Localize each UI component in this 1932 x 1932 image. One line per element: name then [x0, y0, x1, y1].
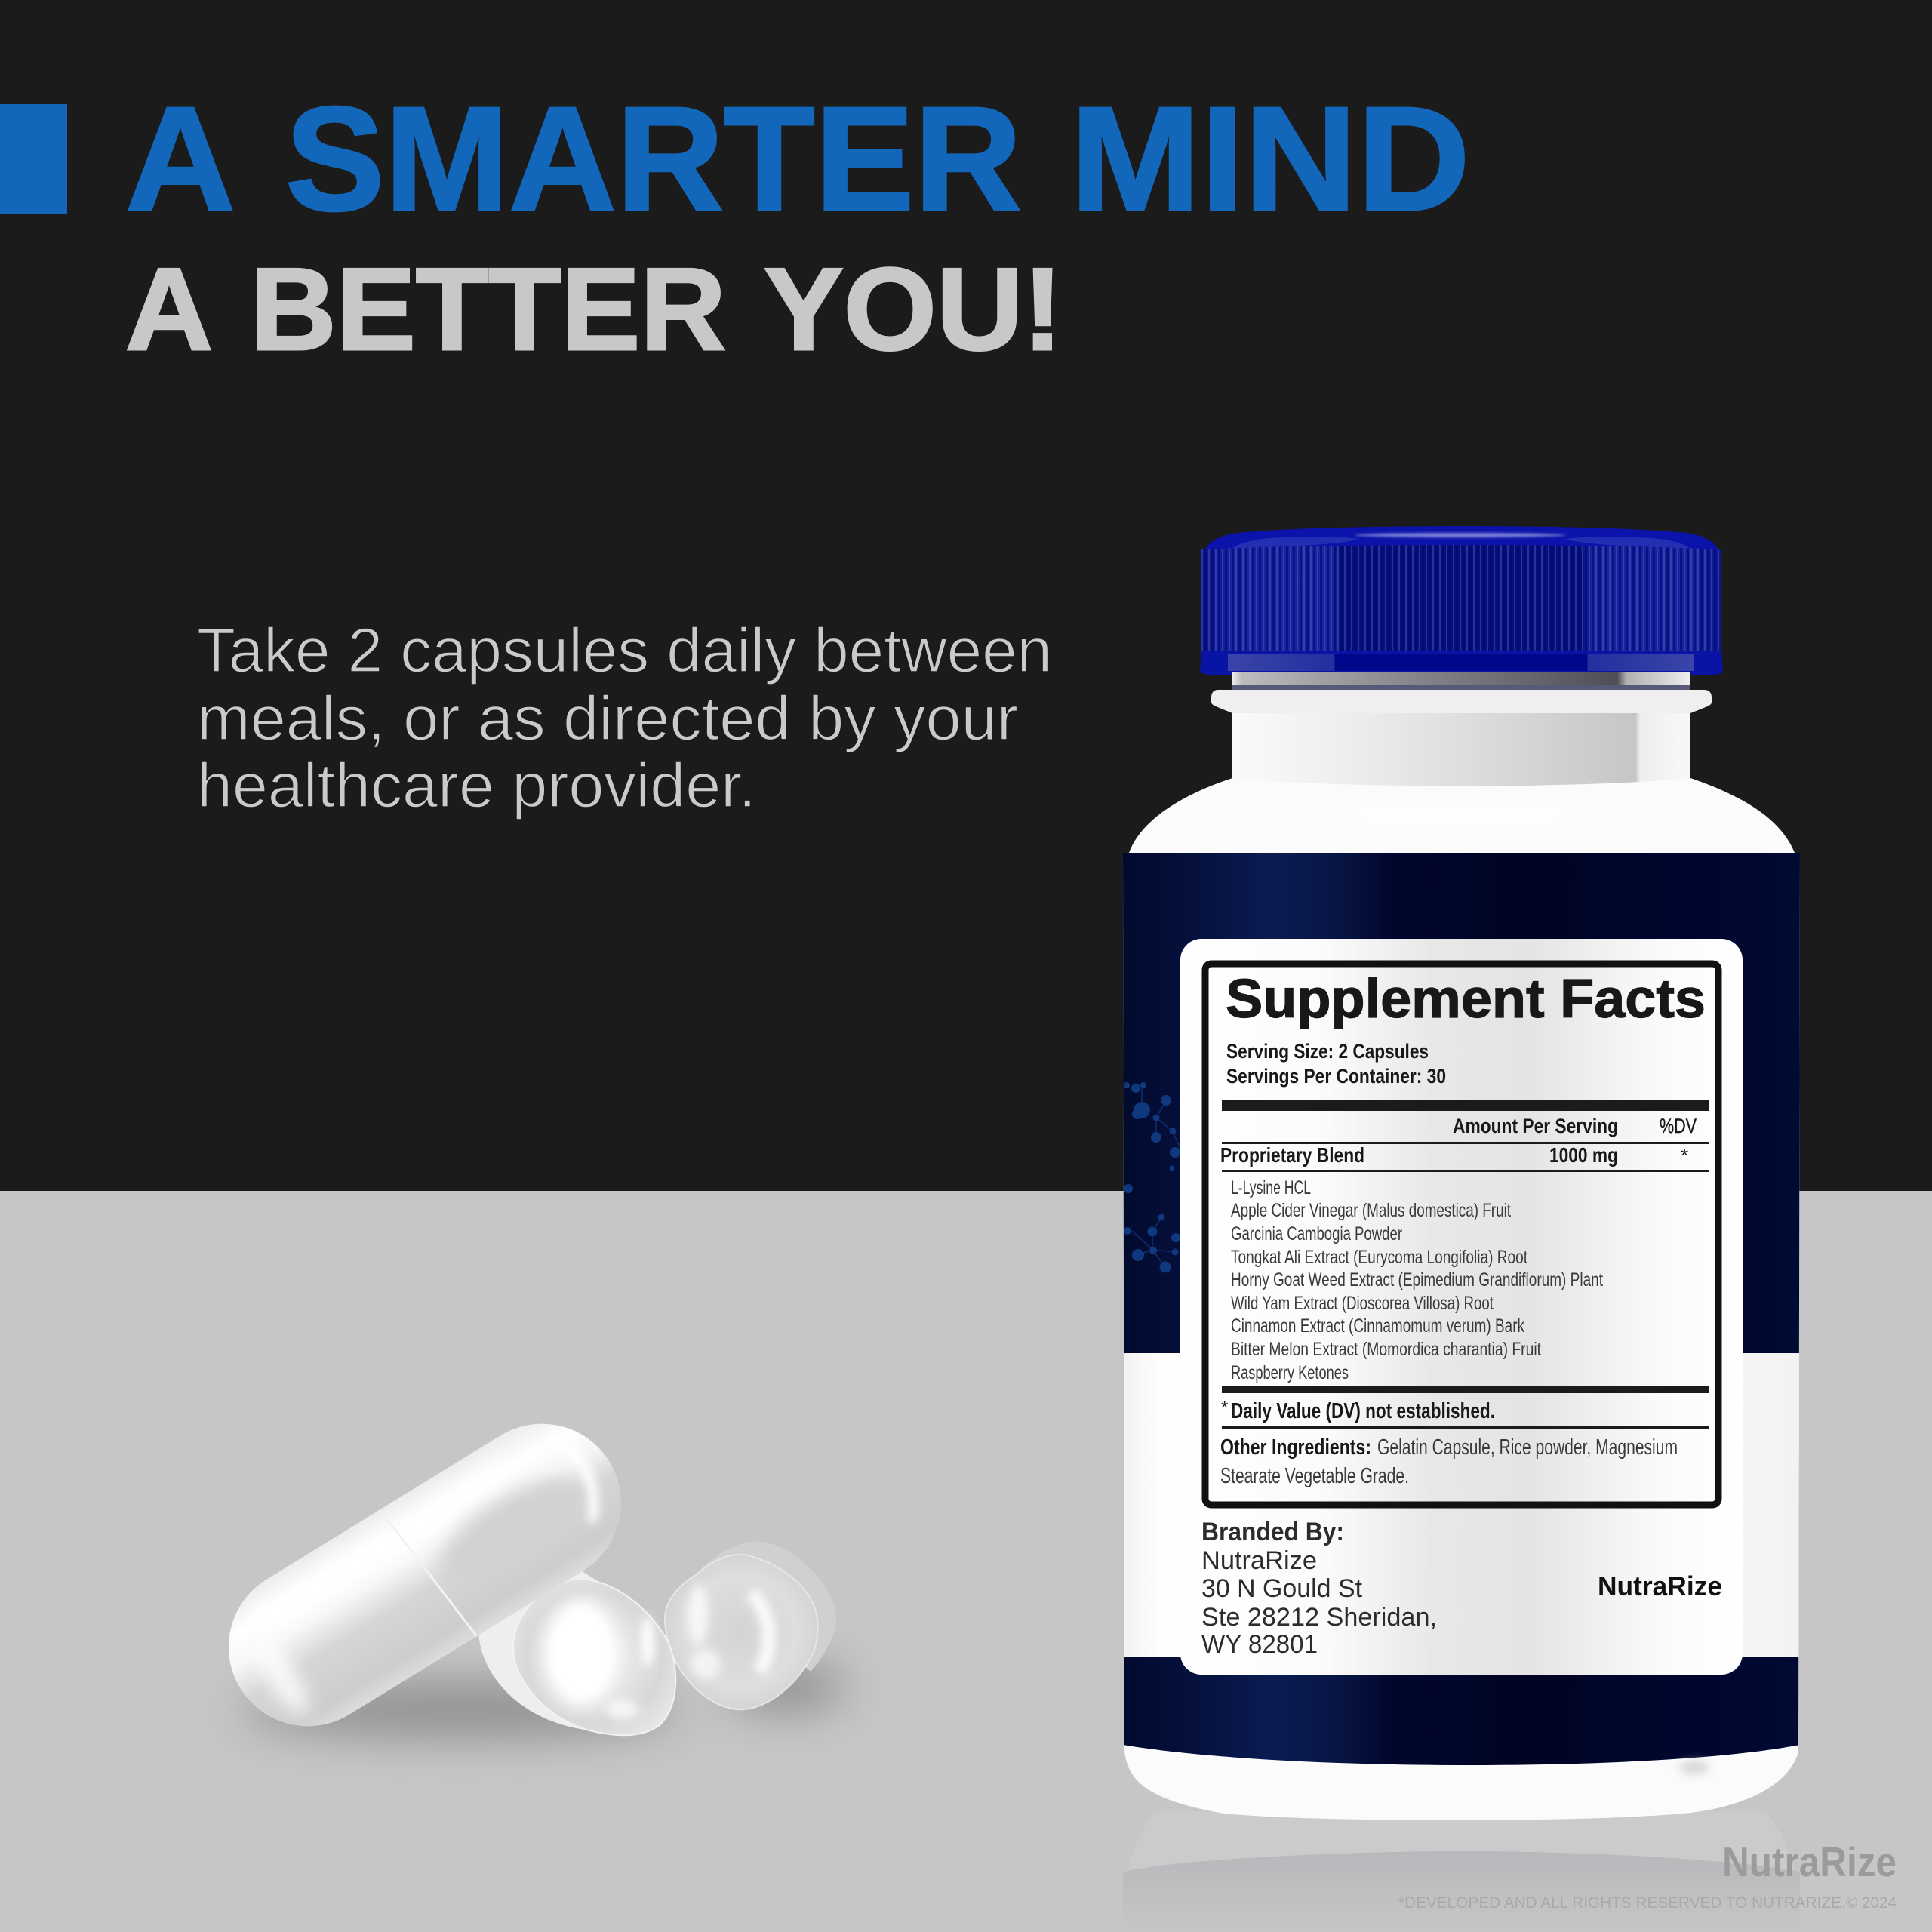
bottom base glare: [1679, 1761, 1709, 1774]
table header: %DV: [1660, 1115, 1697, 1137]
other ingredients: Stearate Vegetable Grade.: [1220, 1464, 1409, 1488]
heading line one: [125, 76, 1470, 242]
label wrap: [1123, 853, 1800, 1765]
heading line two: BETTER: [251, 244, 726, 374]
collar: [1211, 690, 1712, 713]
bottle body: [1123, 778, 1800, 1820]
directions text block: meals, or as directed by your: [197, 683, 1018, 753]
ingredient list: Bitter Melon Extract (Momordica charantia) Fruit: [1231, 1339, 1541, 1360]
proprietary blend row: Proprietary Blend: [1220, 1143, 1364, 1167]
branded by address: Ste 28212 Sheridan,: [1201, 1603, 1437, 1632]
serving information: Serving Size: 2 Capsules: [1226, 1040, 1429, 1063]
background: light lower area: [0, 1191, 1932, 1932]
ingredient list: Horny Goat Weed Extract (Epimedium Grandiflorum) Plant: [1231, 1269, 1603, 1291]
label dark lower: [1123, 1657, 1800, 1765]
directions text block: [197, 615, 1052, 820]
bottle cap: [1200, 526, 1723, 675]
branded by address: WY 82801: [1201, 1630, 1318, 1659]
neck: [1232, 706, 1690, 790]
ingredient list: Tongkat Ali Extract (Eurycoma Longifolia) Root: [1231, 1247, 1527, 1268]
ingredient list: Cinnamon Extract (Cinnamomum verum) Bark: [1231, 1315, 1524, 1337]
branded by address: [1201, 1518, 1437, 1659]
daily value note: Daily Value (DV) not established.: [1231, 1399, 1495, 1423]
supplement facts title: Supplement Facts: [1226, 969, 1706, 1029]
ingredient list: Raspberry Ketones: [1231, 1362, 1349, 1383]
heading line two: [125, 244, 1063, 374]
directions text block: Take 2 capsules daily between: [197, 615, 1052, 685]
proprietary blend row: [1220, 1143, 1688, 1167]
watermark logo: NutraRize: [1722, 1838, 1897, 1885]
other ingredients: Other Ingredients:: [1220, 1435, 1371, 1460]
capsules group: [199, 1394, 845, 1756]
branded by address: NutraRize: [1201, 1546, 1317, 1575]
other ingredients: [1220, 1435, 1678, 1488]
label logo: NutraRize: [1598, 1571, 1722, 1601]
capsule half: small right: [665, 1541, 836, 1709]
ingredient list: Wild Yam Extract (Dioscorea Villosa) Root: [1231, 1293, 1494, 1314]
branded by address: 30 N Gould St: [1201, 1574, 1363, 1603]
table header: Amount Per Serving: [1453, 1115, 1618, 1137]
other ingredients: Gelatin Capsule, Rice powder, Magnesium: [1377, 1435, 1678, 1460]
proprietary blend row: 1000 mg: [1549, 1143, 1618, 1167]
neck ring: [1232, 672, 1690, 686]
cap top rim: [1201, 526, 1721, 562]
capsule seam: [378, 1501, 477, 1646]
ingredient list: L-Lysine HCL: [1231, 1177, 1311, 1198]
copyright line: *DEVELOPED AND ALL RIGHTS RESERVED TO NUTRARIZE.© 2024: [1398, 1894, 1897, 1912]
proprietary blend row: *: [1681, 1144, 1688, 1167]
serving information: Servings Per Container: 30: [1226, 1065, 1446, 1088]
neck shadow line: [1232, 685, 1690, 691]
cap highlight: [1355, 533, 1566, 537]
molecule pattern: [1124, 1082, 1180, 1272]
supplement facts box: [1205, 964, 1718, 1505]
label dark upper: [1123, 853, 1800, 1353]
bottle reflection: [1123, 1811, 1800, 1932]
heading line one: MIND: [1070, 76, 1470, 242]
branded by address: Branded By:: [1201, 1518, 1344, 1546]
cap bevel sweep: [1232, 537, 1690, 549]
cap inner band: [1228, 654, 1694, 671]
heading line one: SMARTER: [285, 76, 1022, 242]
heading accent block: [0, 104, 67, 214]
ingredient list: Apple Cider Vinegar (Malus domestica) Fruit: [1231, 1200, 1511, 1221]
heading line one: A: [125, 76, 235, 242]
capsule large: [199, 1394, 651, 1756]
heading line two: YOU!: [764, 244, 1063, 374]
daily value note: *: [1221, 1398, 1228, 1418]
capsule half: middle: [478, 1566, 675, 1735]
bottle: [1123, 526, 1800, 1820]
thick rule: [1222, 1100, 1709, 1111]
capsule shadow: [242, 1663, 845, 1737]
directions text block: healthcare provider.: [197, 750, 756, 820]
ingredient list: Garcinia Cambogia Powder: [1231, 1223, 1402, 1244]
ingredient list: [1231, 1177, 1603, 1383]
cap ribbed wall: [1201, 543, 1721, 654]
cap base band: [1200, 651, 1723, 675]
white label panel: [1180, 939, 1743, 1675]
label white band: [1123, 1353, 1800, 1657]
shoulder highlight: [1347, 806, 1574, 824]
heading line two: A: [125, 244, 213, 374]
background: dark upper area: [0, 0, 1932, 1191]
serving information: [1226, 1040, 1446, 1088]
